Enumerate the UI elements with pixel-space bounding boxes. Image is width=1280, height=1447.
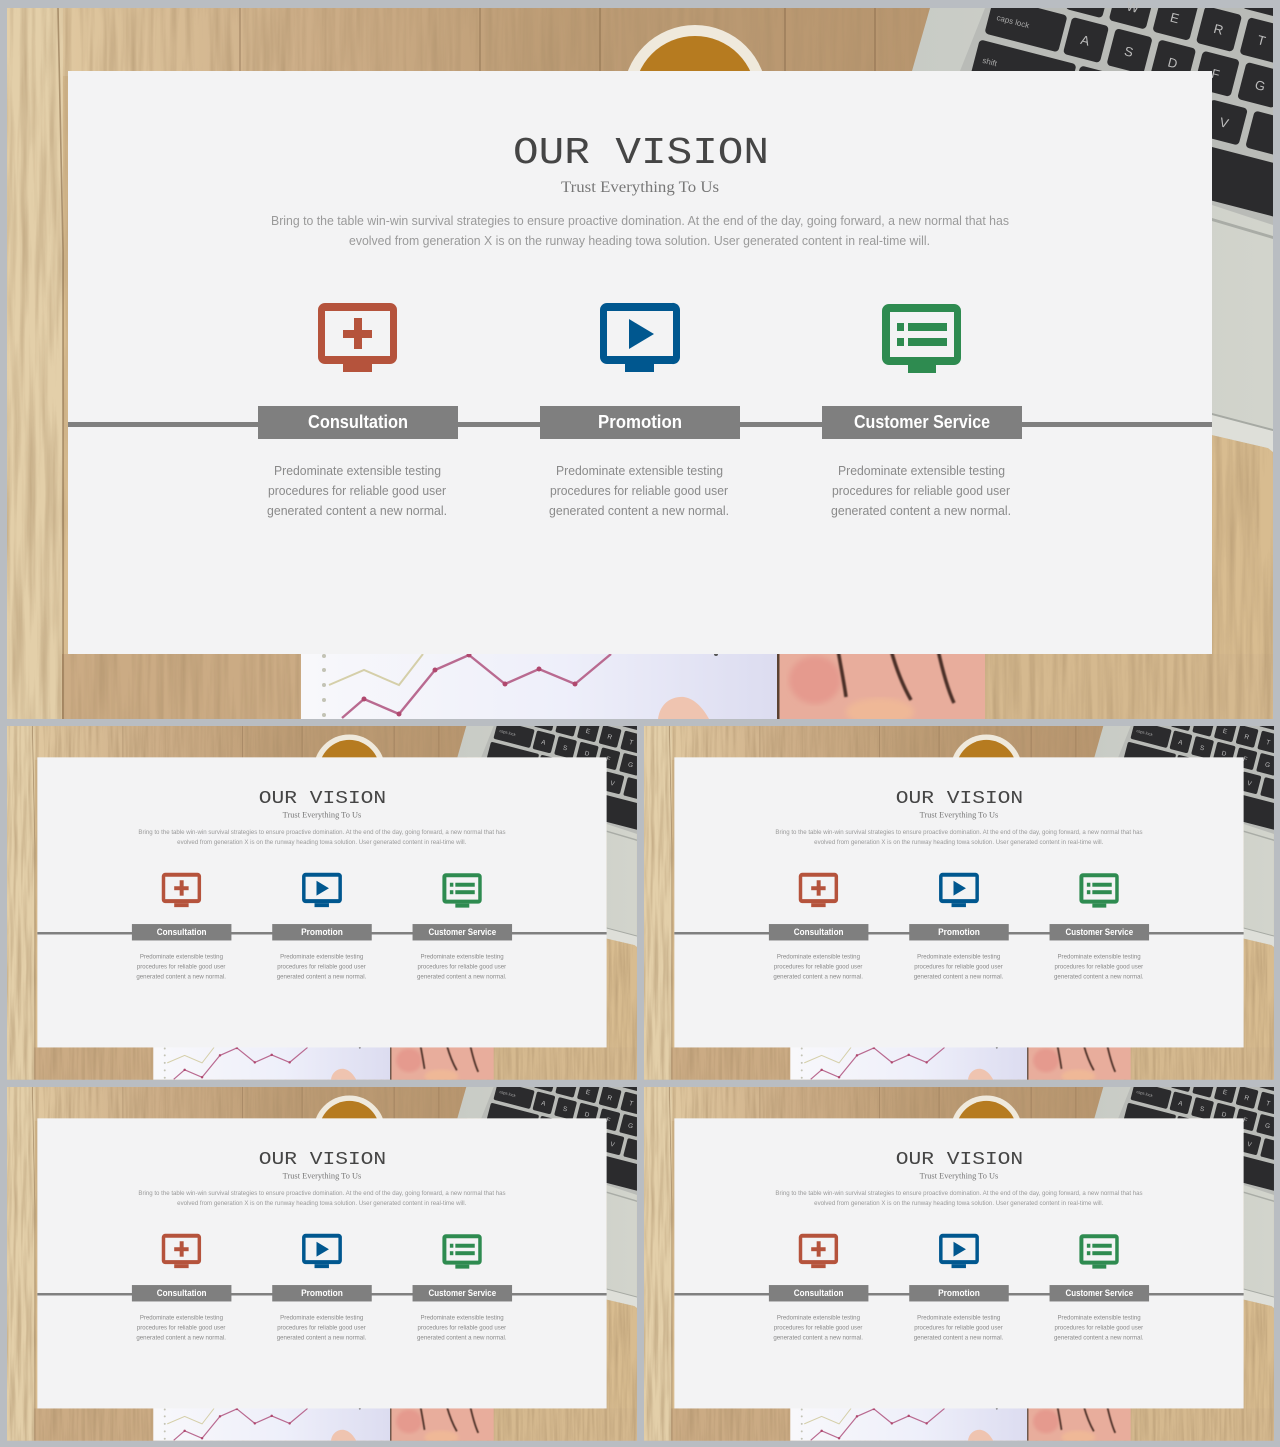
label: Consultation: Consultation: [794, 927, 844, 937]
laptop key legends: caps lock: [1136, 1089, 1153, 1098]
title: OUR VISION: [896, 787, 1023, 809]
label: Promotion: [909, 924, 1009, 940]
laptop key legends: T: [628, 1100, 634, 1108]
description: Customer Service: Predominate extensible testing: [421, 1314, 504, 1321]
laptop key legends: [1130, 707, 1276, 791]
label: Consultation: Consultation: [157, 1288, 207, 1298]
divider line: [674, 1293, 1244, 1295]
subtitle: Trust Everything To Us: [561, 179, 719, 196]
label: Consultation: [132, 1285, 231, 1301]
label: Promotion: [540, 406, 740, 439]
laptop key legends: R: [1212, 21, 1225, 38]
content panel: [674, 757, 1244, 1047]
description: Customer Service: generated content a new normal.: [417, 973, 507, 980]
description: Customer Service: Predominate extensible testing: [421, 953, 504, 960]
description: Consultation: generated content a new normal.: [773, 973, 863, 980]
title: OUR VISION: [896, 1148, 1023, 1170]
description: Consultation: Predominate extensible testing: [777, 953, 860, 960]
description: Consultation: procedures for reliable good user: [774, 1324, 863, 1331]
laptop key legends: T: [1265, 1100, 1271, 1108]
laptop key legends: D: [1221, 750, 1227, 758]
description: Promotion: generated content a new normal.: [914, 1334, 1003, 1341]
slide 5: small, row 2 right: [644, 1038, 1280, 1444]
subtitle: Trust Everything To Us: [283, 811, 361, 820]
description: Customer Service: Predominate extensible testing: [1058, 953, 1141, 960]
laptop key legends: E: [585, 728, 591, 736]
subtitle: Trust Everything To Us: [920, 811, 998, 820]
description: Promotion: Predominate extensible testing: [280, 953, 364, 960]
laptop key legends: D: [1166, 55, 1179, 71]
slide 4: small, row 2 left: [7, 1038, 712, 1444]
description: Consultation: [136, 953, 226, 980]
label: Customer Service: Customer Service: [854, 412, 990, 432]
description: Promotion: [277, 1314, 367, 1341]
icon: monitor with list: [442, 1234, 482, 1269]
laptop key legends: [493, 707, 639, 791]
label: Consultation: [769, 1285, 868, 1301]
description: Promotion: procedures for reliable good user: [914, 1324, 1004, 1331]
intro paragraph: Bring to the table win-win survival strategies to ensure proactive domination. At the end of the day, going forward, a new normal that has: [271, 213, 1009, 228]
laptop key legends: E: [1222, 728, 1228, 736]
laptop key legends: S: [1199, 744, 1206, 753]
description: Promotion: procedures for reliable good user: [914, 963, 1004, 970]
icon: monitor with plus: [799, 1234, 838, 1268]
laptop key legends: S: [1123, 43, 1135, 60]
laptop key legends: T: [628, 739, 634, 747]
subtitle: Trust Everything To Us: [283, 1172, 361, 1181]
intro paragraph: [138, 1190, 506, 1207]
laptop key legends: T: [1256, 32, 1267, 49]
laptop key legends: G: [627, 761, 634, 769]
laptop key legends: A: [1177, 739, 1184, 747]
intro paragraph: evolved from generation X is on the runway heading towa solution. User generated content in real-time will.: [349, 233, 930, 248]
laptop key legends: E: [585, 1089, 591, 1097]
description: Promotion: Predominate extensible testing: [556, 463, 723, 478]
label: Promotion: Promotion: [301, 1288, 343, 1298]
label: Consultation: [132, 924, 231, 940]
intro paragraph: Bring to the table win-win survival strategies to ensure proactive domination. At the end of the day, going forward, a new normal that has: [775, 1190, 1143, 1197]
intro paragraph: [775, 829, 1143, 846]
intro paragraph: Bring to the table win-win survival strategies to ensure proactive domination. At the end of the day, going forward, a new normal that has: [138, 1190, 506, 1197]
description: Customer Service: generated content a new normal.: [831, 503, 1011, 518]
description: Promotion: [277, 953, 367, 980]
description: Promotion: generated content a new normal.: [914, 973, 1003, 980]
laptop key legends: V: [1246, 780, 1253, 788]
description: Promotion: [914, 1314, 1004, 1341]
laptop key legends: F: [605, 1117, 611, 1124]
description: Promotion: Predominate extensible testing: [280, 1314, 364, 1321]
description: Customer Service: generated content a new normal.: [1054, 1334, 1144, 1341]
intro paragraph: Bring to the table win-win survival strategies to ensure proactive domination. At the end of the day, going forward, a new normal that has: [138, 829, 506, 836]
background photo: [7, 677, 712, 1083]
description: Consultation: procedures for reliable good user: [137, 1324, 226, 1331]
label: Consultation: Consultation: [157, 927, 207, 937]
laptop key legends: [493, 1068, 639, 1152]
laptop key legends: A: [1079, 32, 1092, 49]
laptop key legends: E: [1222, 1089, 1228, 1097]
divider line: [37, 1293, 607, 1295]
description: Consultation: procedures for reliable good user: [268, 483, 447, 498]
label: Consultation: [258, 406, 458, 439]
description: Consultation: procedures for reliable good user: [774, 963, 863, 970]
intro paragraph: evolved from generation X is on the runway heading towa solution. User generated content in real-time will.: [814, 1200, 1103, 1207]
intro paragraph: [775, 1190, 1143, 1207]
laptop key legends: [981, 0, 1278, 138]
icon: monitor with play: [939, 1234, 979, 1268]
laptop key legends: D: [584, 1111, 590, 1119]
icon: monitor with list: [1079, 873, 1119, 908]
laptop key legends: R: [607, 1094, 613, 1102]
description: Promotion: procedures for reliable good user: [277, 1324, 367, 1331]
icon: monitor with plus: [162, 1234, 201, 1268]
laptop key legends: A: [540, 739, 547, 747]
description: Promotion: Predominate extensible testing: [917, 953, 1001, 960]
title: OUR VISION: [259, 1148, 386, 1170]
description: Consultation: [267, 463, 447, 518]
background photo: [644, 1038, 1280, 1444]
description: Consultation: [773, 953, 863, 980]
label: Customer Service: [1050, 924, 1149, 940]
description: Promotion: [549, 463, 729, 518]
title: OUR VISION: [513, 132, 769, 175]
laptop key legends: F: [1242, 1117, 1248, 1124]
icon: monitor with list: [1079, 1234, 1119, 1269]
background photo: desk, coffee, laptop, chart, hand: [7, 0, 1280, 726]
label: Consultation: [769, 924, 868, 940]
description: Customer Service: [1054, 953, 1144, 980]
label: Customer Service: Customer Service: [428, 927, 496, 937]
label: Customer Service: Customer Service: [428, 1288, 496, 1298]
description: Consultation: procedures for reliable good user: [137, 963, 226, 970]
intro paragraph: evolved from generation X is on the runway heading towa solution. User generated content in real-time will.: [177, 1200, 466, 1207]
description: Consultation: Predominate extensible testing: [274, 463, 441, 478]
label: Customer Service: [413, 1285, 512, 1301]
laptop key legends: R: [1244, 1094, 1250, 1102]
label: Promotion: Promotion: [301, 927, 343, 937]
description: Consultation: Predominate extensible testing: [777, 1314, 860, 1321]
description: Consultation: Predominate extensible testing: [140, 953, 223, 960]
description: Promotion: Predominate extensible testing: [917, 1314, 1001, 1321]
content panel: [674, 1118, 1244, 1408]
content panel: [37, 757, 607, 1047]
description: Customer Service: procedures for reliable good user: [418, 963, 507, 970]
laptop key legends: R: [1244, 733, 1250, 741]
laptop key legends: V: [1246, 1141, 1253, 1149]
laptop key legends: caps lock: [499, 1089, 516, 1098]
laptop key legends: A: [1177, 1100, 1184, 1108]
label: Customer Service: [413, 924, 512, 940]
background photo: [644, 677, 1280, 1083]
laptop key legends: [1130, 1068, 1276, 1152]
divider line: [68, 422, 1212, 427]
icon: monitor with play: [939, 873, 979, 907]
laptop key legends: caps lock: [499, 728, 516, 737]
description: Promotion: procedures for reliable good user: [550, 483, 729, 498]
description: Promotion: generated content a new normal.: [277, 973, 366, 980]
description: Promotion: generated content a new normal.: [549, 503, 729, 518]
label: Customer Service: [822, 406, 1022, 439]
laptop key legends: E: [1169, 10, 1181, 26]
laptop key legends: shift: [982, 56, 999, 68]
description: Customer Service: Predominate extensible testing: [838, 463, 1005, 478]
laptop key legends: V: [1218, 114, 1230, 131]
icon: monitor with play: [302, 873, 342, 907]
description: Consultation: [136, 1314, 226, 1341]
description: Customer Service: Predominate extensible testing: [1058, 1314, 1141, 1321]
laptop key legends: T: [1265, 739, 1271, 747]
description: Consultation: Predominate extensible testing: [140, 1314, 223, 1321]
laptop key legends: R: [607, 733, 613, 741]
divider line: [674, 932, 1244, 934]
laptop key legends: F: [605, 756, 611, 763]
background photo: [7, 1038, 712, 1444]
description: Consultation: generated content a new normal.: [136, 973, 226, 980]
description: Promotion: generated content a new normal.: [277, 1334, 366, 1341]
label: Promotion: [272, 924, 372, 940]
icon: monitor with plus: [799, 873, 838, 907]
description: Consultation: [773, 1314, 863, 1341]
divider line: [37, 932, 607, 934]
laptop key legends: caps lock: [1136, 728, 1153, 737]
description: Promotion: [914, 953, 1004, 980]
description: Customer Service: procedures for reliable good user: [418, 1324, 507, 1331]
laptop key legends: S: [562, 744, 569, 753]
description: Consultation: generated content a new normal.: [267, 503, 447, 518]
laptop key legends: S: [1199, 1105, 1206, 1114]
laptop key legends: V: [609, 780, 616, 788]
laptop key legends: D: [1221, 1111, 1227, 1119]
description: Customer Service: generated content a new normal.: [1054, 973, 1144, 980]
laptop key legends: S: [562, 1105, 569, 1114]
label: Consultation: Consultation: [794, 1288, 844, 1298]
label: Customer Service: [1050, 1285, 1149, 1301]
icon: monitor with play: [600, 303, 680, 372]
icon: monitor with plus: [318, 303, 397, 372]
laptop key legends: G: [627, 1122, 634, 1130]
laptop key legends: F: [1210, 66, 1221, 82]
slide 1: large: [7, 0, 1280, 726]
title: OUR VISION: [259, 787, 386, 809]
label: Customer Service: Customer Service: [1065, 927, 1133, 937]
description: Customer Service: [1054, 1314, 1144, 1341]
icon: monitor with play: [302, 1234, 342, 1268]
description: Customer Service: [417, 1314, 507, 1341]
laptop key legends: D: [584, 750, 590, 758]
slide 3: small, row 1 right: [644, 677, 1280, 1083]
slide 2: small, row 1 left: [7, 677, 712, 1083]
label: Customer Service: Customer Service: [1065, 1288, 1133, 1298]
description: Customer Service: generated content a new normal.: [417, 1334, 507, 1341]
label: Promotion: [272, 1285, 372, 1301]
description: Customer Service: procedures for reliable good user: [1055, 1324, 1144, 1331]
description: Consultation: generated content a new normal.: [136, 1334, 226, 1341]
subtitle: Trust Everything To Us: [920, 1172, 998, 1181]
laptop key legends: G: [1264, 1122, 1271, 1130]
laptop key legends: F: [1242, 756, 1248, 763]
description: Consultation: generated content a new normal.: [773, 1334, 863, 1341]
label: Promotion: Promotion: [598, 412, 682, 432]
label: Promotion: Promotion: [938, 927, 980, 937]
content panel: [68, 71, 1212, 654]
content panel: [37, 1118, 607, 1408]
intro paragraph: Bring to the table win-win survival strategies to ensure proactive domination. At the end of the day, going forward, a new normal that has: [775, 829, 1143, 836]
laptop key legends: G: [1253, 77, 1267, 94]
description: Customer Service: [831, 463, 1011, 518]
intro paragraph: evolved from generation X is on the runway heading towa solution. User generated content in real-time will.: [814, 839, 1103, 846]
label: Consultation: Consultation: [308, 412, 408, 432]
laptop key legends: G: [1264, 761, 1271, 769]
intro paragraph: evolved from generation X is on the runway heading towa solution. User generated content in real-time will.: [177, 839, 466, 846]
laptop key legends: A: [540, 1100, 547, 1108]
description: Customer Service: [417, 953, 507, 980]
label: Promotion: [909, 1285, 1009, 1301]
label: Promotion: Promotion: [938, 1288, 980, 1298]
description: Customer Service: procedures for reliable good user: [832, 483, 1011, 498]
laptop key legends: caps lock: [996, 13, 1031, 30]
icon: monitor with list: [882, 304, 961, 373]
intro paragraph: [138, 829, 506, 846]
icon: monitor with list: [442, 873, 482, 908]
icon: monitor with plus: [162, 873, 201, 907]
laptop key legends: V: [609, 1141, 616, 1149]
description: Customer Service: procedures for reliable good user: [1055, 963, 1144, 970]
description: Promotion: procedures for reliable good user: [277, 963, 367, 970]
intro paragraph: [271, 213, 1009, 248]
